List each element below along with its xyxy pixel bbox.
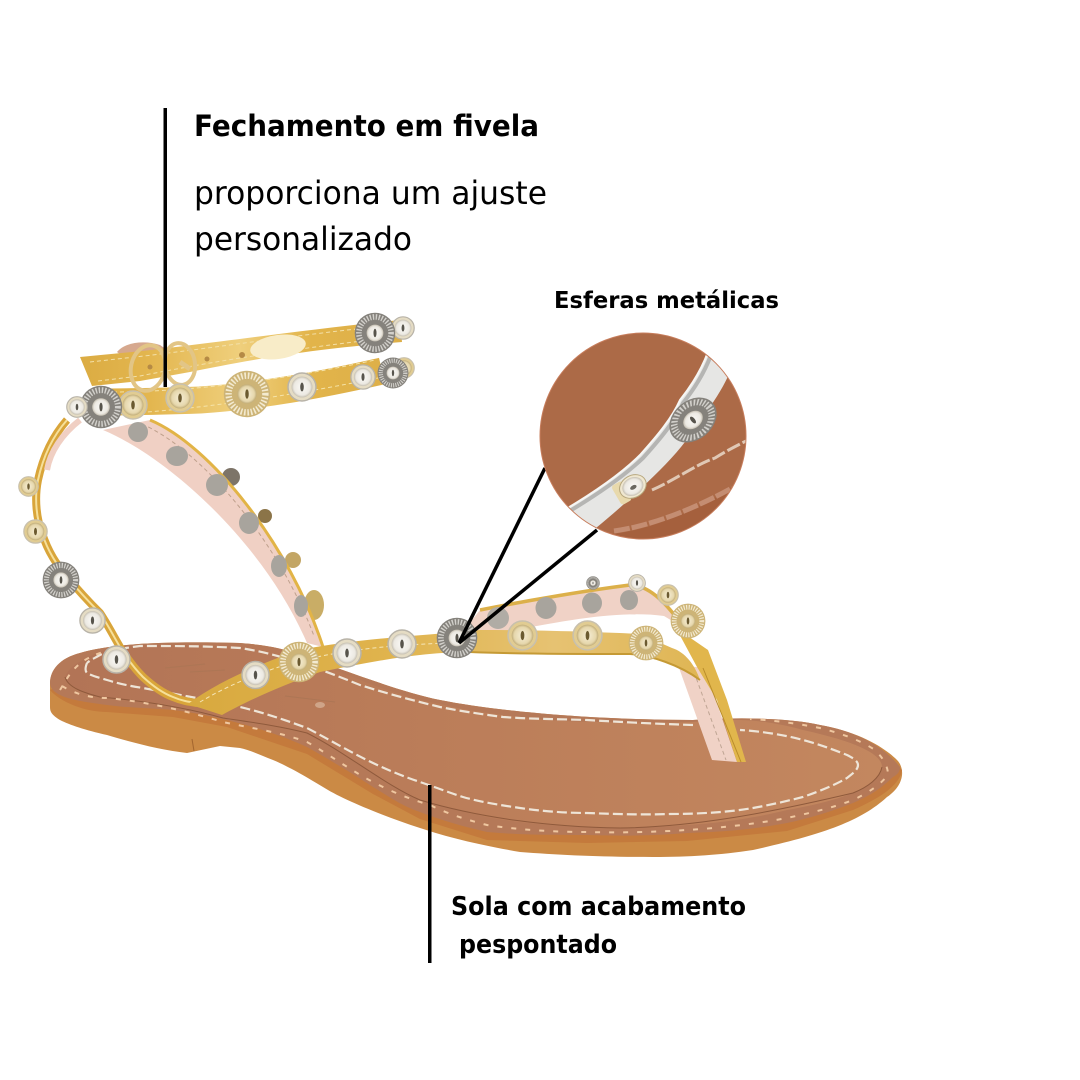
thong post [676, 628, 746, 762]
heading: Fechamento em fivela: Fechamento em fivela [194, 109, 539, 143]
leader lines: metal spheres callout [459, 468, 597, 643]
buckle [127, 341, 198, 394]
front strap studs [242, 575, 705, 689]
pink upper toe strap [456, 585, 684, 640]
sandal illustration [19, 313, 902, 857]
text: proporciona um ajuste personalizado: personalizado [194, 220, 412, 258]
heading: Sola com acabamento pespontado: Sola com acabamento [451, 892, 746, 922]
stitch [652, 440, 748, 490]
heading: Sola com acabamento pespontado [451, 892, 746, 960]
lens rim [540, 333, 746, 539]
ribbed disc [669, 398, 717, 442]
heading: Esferas metálicas: Esferas metálicas [554, 288, 779, 314]
braided welt [614, 494, 728, 538]
leader line: buckle [164, 108, 167, 387]
heading: Sola com acabamento pespontado: pespontado [459, 930, 617, 960]
sole with welt [50, 642, 902, 857]
upper ankle strap with tab [80, 320, 402, 386]
text: proporciona um ajuste personalizado [194, 174, 547, 258]
pink back strap behind the loop [103, 420, 324, 647]
lower ankle strap [100, 360, 382, 414]
text: proporciona um ajuste personalizado: proporciona um ajuste [194, 174, 547, 212]
detail lens: metal spheres close-up [540, 334, 746, 538]
heel notch [192, 739, 194, 751]
close-up stud [612, 474, 647, 504]
left ankle loop [36, 420, 197, 703]
silver strap [560, 352, 730, 528]
gold front strap [188, 630, 700, 715]
logo on insole [165, 664, 225, 672]
leader line: sole [428, 785, 432, 963]
stitching [86, 646, 858, 814]
ankle strap studs [67, 313, 414, 428]
left loop studs [19, 477, 130, 673]
infographic canvas [18, 108, 902, 963]
